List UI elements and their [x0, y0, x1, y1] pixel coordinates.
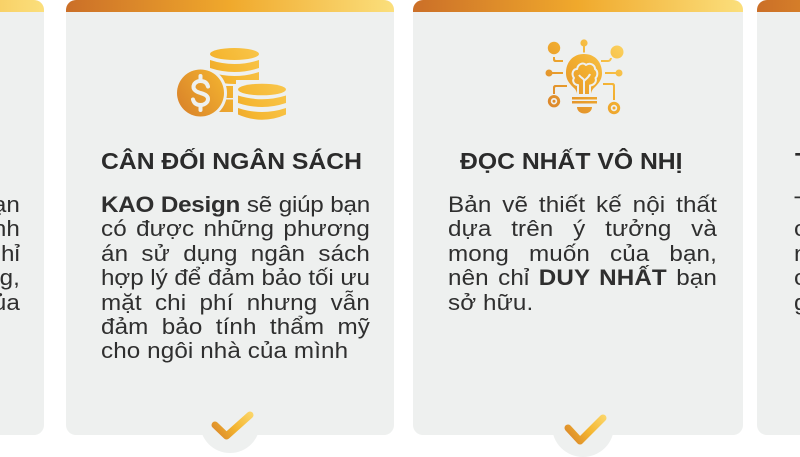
heading: budget: CÂN ĐỐI NGÂN SÁCH	[101, 148, 362, 174]
heading: unique: ĐỌC NHẤT VÔ NHỊ	[460, 148, 683, 174]
body text: unique: dựa trên ý tưởng và	[448, 216, 717, 241]
body text: budget: mặt chi phí nhưng vẫn	[101, 290, 370, 315]
body text: unique: sở hữu.	[448, 290, 533, 315]
body text: budget: cho ngôi nhà của mình	[101, 338, 348, 363]
body text: unique: mong muốn của bạn,	[448, 241, 717, 266]
check badge: card 3	[552, 395, 614, 457]
body text: unique: Bản vẽ thiết kế nội thất	[448, 192, 717, 217]
body text: budget: đảm bảo tính thẩm mỹ	[101, 314, 370, 339]
partial body text	[0, 192, 20, 314]
panel: unique card	[413, 0, 743, 435]
body text: budget: KAO Design sẽ giúp bạn	[101, 192, 370, 217]
body text: budget: án sử dụng ngân sách	[101, 241, 370, 266]
body text: budget: có được những phương	[101, 216, 370, 241]
body text: budget: hợp lý để đảm bảo tối ưu	[101, 265, 370, 290]
brain cutout	[573, 64, 597, 94]
partial body text: hỉ	[1, 241, 20, 266]
panel: right partial card	[757, 0, 800, 435]
icon: check mark card 2	[212, 412, 254, 440]
panel: left partial card	[0, 0, 44, 435]
partial body text	[794, 192, 800, 315]
icon: check mark card 3	[564, 414, 606, 444]
body text: unique: nên chỉ DUY NHẤT bạn	[448, 265, 717, 290]
check badge: card 2	[200, 393, 260, 453]
icon: light bulb with brain	[546, 39, 624, 114]
body text: budget	[101, 192, 370, 363]
body text: unique	[448, 192, 717, 315]
icon: coins and dollar	[177, 48, 286, 120]
panel: budget card	[66, 0, 394, 435]
